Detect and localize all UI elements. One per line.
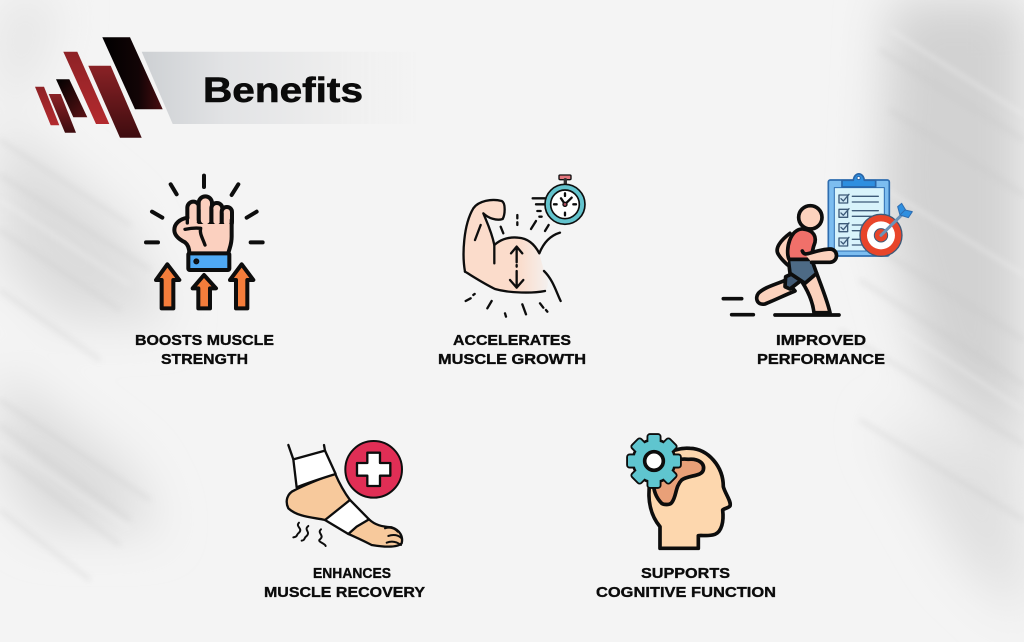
label: MUSCLE GROWTH <box>438 352 586 368</box>
benefit: boosts muscle strength <box>135 176 274 368</box>
label: BOOSTS MUSCLE <box>135 333 274 349</box>
label: MUSCLE RECOVERY <box>264 585 425 601</box>
logo: stripes <box>35 37 163 138</box>
benefit: improved performance <box>723 174 912 368</box>
icon: runner with checklist and target <box>723 174 912 315</box>
label: IMPROVED <box>776 333 866 349</box>
icon: fist with arrows <box>146 176 263 308</box>
title banner <box>142 52 420 124</box>
icon: bandaged foot with medical cross <box>287 441 402 547</box>
icon: flexed arm with stopwatch <box>464 175 585 317</box>
label: ENHANCES <box>313 566 391 582</box>
label: STRENGTH <box>161 352 248 368</box>
label: PERFORMANCE <box>757 352 885 368</box>
benefit: enhances muscle recovery <box>264 441 425 601</box>
benefit: supports cognitive function <box>596 435 776 601</box>
label: ACCELERATES <box>453 333 571 349</box>
heading: Benefits <box>203 71 363 110</box>
benefit: accelerates muscle growth <box>438 175 586 368</box>
label: COGNITIVE FUNCTION <box>596 585 776 601</box>
label: SUPPORTS <box>641 566 730 582</box>
icon: head with gear <box>628 435 730 548</box>
